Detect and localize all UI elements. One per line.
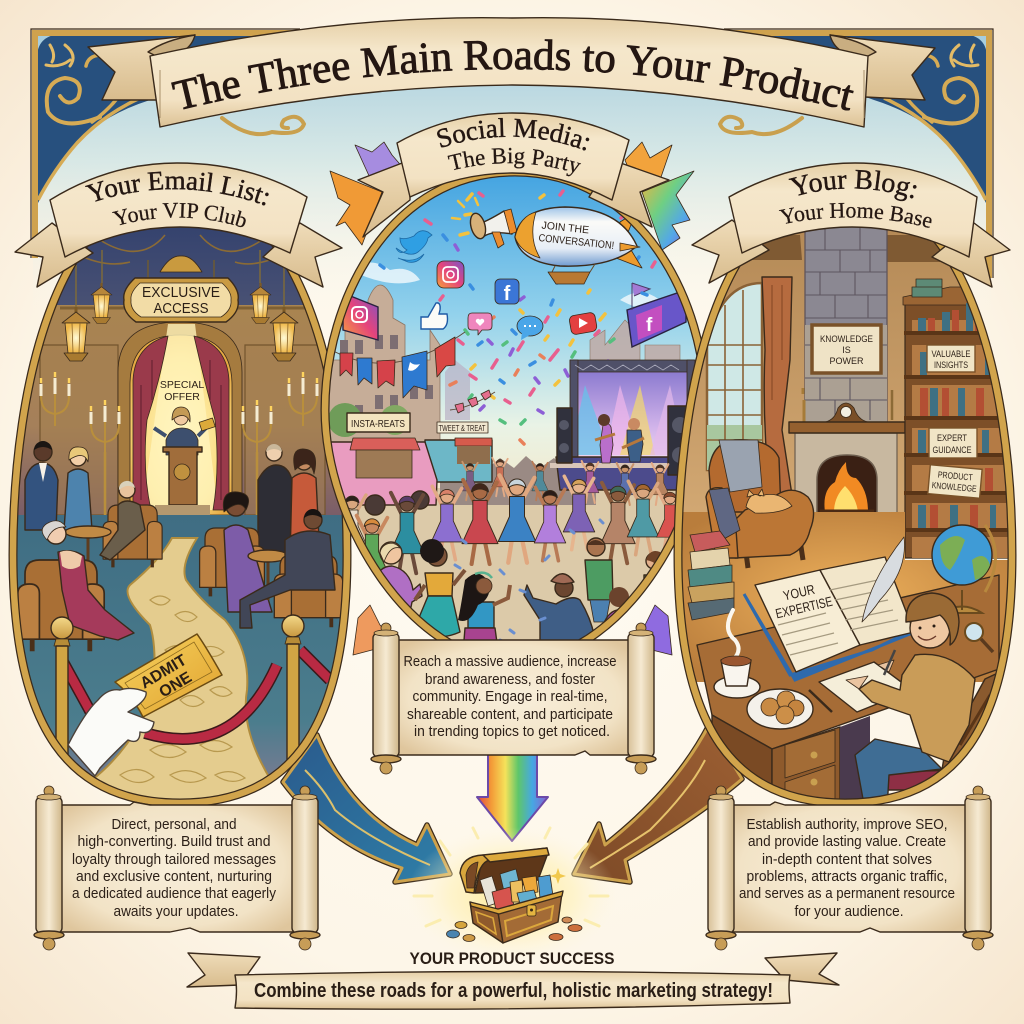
ribbon: social media bbox=[357, 112, 670, 238]
blimp: join the conversation bbox=[515, 207, 642, 284]
social description text: in trending topics to get noticed. bbox=[414, 723, 610, 740]
foreground dancer: green vest bbox=[585, 538, 613, 622]
round table left bbox=[66, 525, 112, 560]
mid-floor dancers bbox=[337, 458, 684, 592]
open book: your expertise: EXPERTISE bbox=[774, 594, 834, 621]
email description text: loyalty through tailored messages bbox=[72, 851, 276, 868]
scroll: email description bbox=[34, 786, 320, 950]
stone chimney bbox=[805, 225, 887, 425]
white glove hand bbox=[68, 688, 154, 776]
email description text: high-converting. Build trust and bbox=[78, 833, 270, 850]
chest body bbox=[470, 891, 563, 943]
ornamental frame with sky bbox=[31, 29, 993, 321]
globe bbox=[932, 525, 996, 613]
armchair with blanket bbox=[706, 440, 814, 568]
title ribbon bbox=[87, 17, 936, 128]
city buildings left bbox=[325, 285, 470, 445]
panel: social media party oval scene bbox=[320, 165, 710, 670]
plate of cookies bbox=[747, 689, 813, 729]
lantern small right bbox=[250, 283, 271, 324]
heading: social media: Social Media: bbox=[437, 118, 590, 150]
chest caption: YOUR PRODUCT SUCCESS bbox=[410, 949, 614, 968]
coffee cup with steam bbox=[714, 610, 760, 698]
open book: your expertise: YOUR bbox=[782, 582, 816, 604]
lantern large left bbox=[62, 307, 90, 361]
heading: your email list: Your Email List: bbox=[85, 172, 269, 206]
knowledge is power frame bbox=[812, 325, 881, 373]
special offer label bbox=[160, 381, 204, 400]
treasure chest with glow bbox=[407, 827, 617, 963]
mantel clock and candle bbox=[803, 388, 892, 422]
velvet rope bbox=[62, 650, 330, 739]
bookshelf with labels: KNOWLEDGE bbox=[931, 480, 977, 494]
arrow: rainbow road into chest bbox=[477, 750, 548, 841]
food truck: tweet and treat bbox=[425, 422, 492, 482]
billboard: instagram left bbox=[343, 293, 378, 340]
megaphone icon bbox=[452, 198, 517, 248]
email description text: and exclusive content, nurturing bbox=[76, 868, 272, 885]
special offer label: OFFER bbox=[164, 391, 200, 403]
curtain bbox=[762, 277, 792, 495]
panel: blog home base oval scene bbox=[670, 180, 1020, 810]
spiky party bursts behind centre oval bbox=[330, 142, 694, 655]
lantern large right bbox=[270, 307, 298, 361]
blimp: join the conversation: JOIN THE bbox=[541, 220, 590, 236]
chest contents bbox=[480, 869, 553, 910]
candelabra left wall bbox=[41, 372, 69, 426]
foreground dancer: man with hat bbox=[524, 574, 595, 665]
winding golden carpet road bbox=[94, 537, 269, 798]
chest lid bbox=[460, 848, 549, 893]
food truck: insta-reats: INSTA-REATS bbox=[351, 418, 405, 430]
arrow: brown road into chest bbox=[574, 725, 742, 882]
magnifying glass bbox=[965, 623, 993, 652]
foreground child: purple hoodie bbox=[600, 587, 633, 640]
bookshelf with labels: EXPERT bbox=[937, 433, 967, 444]
facebook icon bbox=[495, 279, 519, 305]
notebook bbox=[819, 662, 912, 712]
blog description text: for your audience. bbox=[794, 903, 904, 920]
ribbon: your email list bbox=[14, 162, 343, 288]
pencil on desk bbox=[809, 690, 832, 712]
social description text: community. Engage in real-time, bbox=[412, 688, 608, 705]
food truck: insta-reats bbox=[328, 413, 437, 515]
guest: woman in red bbox=[291, 448, 320, 536]
knowledge is power frame: POWER bbox=[829, 356, 864, 366]
panel: email VIP club oval scene bbox=[8, 228, 352, 804]
knowledge is power frame: IS bbox=[842, 345, 851, 355]
heart chat icon bbox=[468, 313, 492, 335]
blog description text: Establish authority, improve SEO, bbox=[746, 816, 948, 833]
guest: seated man and chair bbox=[100, 481, 162, 567]
blog description text: problems, attracts organic traffic, bbox=[746, 868, 948, 885]
blog description text: and serves as a permanent resource bbox=[739, 885, 955, 902]
hanging sign: exclusive access: EXCLUSIVE bbox=[142, 285, 220, 301]
gold flourish under title left bbox=[222, 117, 304, 134]
hanging sign: exclusive access: ACCESS bbox=[154, 301, 208, 317]
chat bubble icon bbox=[517, 316, 543, 340]
bookshelf with labels: VALUABLE bbox=[932, 349, 970, 359]
top-left blue corner ornament bbox=[37, 34, 320, 205]
ground and distant crowd bbox=[320, 488, 710, 670]
round table right bbox=[248, 550, 288, 600]
admit one ticket: ONE bbox=[156, 669, 195, 701]
subheading: your vip club: Your VIP Club bbox=[112, 202, 246, 228]
arrow: blue road into chest bbox=[283, 735, 450, 882]
social description text: shareable content, and participate bbox=[407, 706, 613, 723]
special offer label: SPECIAL bbox=[160, 379, 204, 391]
guest: man in blue suit bbox=[25, 441, 58, 530]
title text: The Three Main Roads to Your Product bbox=[171, 39, 854, 110]
social description text: brand awareness, and foster bbox=[425, 671, 595, 688]
floor confetti bbox=[410, 520, 603, 642]
email description text: a dedicated audience that eagerly bbox=[72, 885, 276, 902]
twitter bird icon bbox=[396, 231, 432, 262]
guest: woman in purple on armchair bbox=[200, 492, 272, 612]
confetti bbox=[380, 191, 655, 444]
billboard: facebook right bbox=[627, 283, 686, 347]
blog description text: and provide lasting value. Create bbox=[748, 833, 946, 850]
candelabra standing right bbox=[243, 400, 271, 515]
blog description text: in-depth content that solves bbox=[762, 851, 932, 868]
hanging sign: exclusive access bbox=[124, 256, 238, 322]
email description text: awaits your updates. bbox=[114, 903, 238, 920]
guest: man in grey suit on armchair bbox=[240, 509, 343, 628]
bookshelf with labels: GUIDANCE bbox=[932, 445, 972, 456]
guest: blonde woman bbox=[64, 447, 92, 530]
candelabra standing left bbox=[91, 400, 119, 515]
video play icon bbox=[569, 312, 598, 335]
guest: tuxedo man bbox=[258, 444, 292, 555]
billboard: facebook right: f bbox=[646, 315, 653, 336]
wood floor bbox=[670, 512, 1020, 682]
fireplace bbox=[789, 422, 905, 515]
bottom ribbon message: Combine these roads for a powerful, holistic marketing strategy! bbox=[254, 980, 773, 1002]
bottom ribbon bbox=[187, 953, 839, 1009]
scroll: blog description bbox=[706, 786, 993, 950]
instagram icon bbox=[437, 261, 464, 288]
gold flourish under title right bbox=[720, 117, 802, 134]
scroll: social media description bbox=[371, 623, 656, 774]
subheading: your home base: Your Home Base bbox=[778, 202, 932, 228]
heading: your blog: Your Blog: bbox=[788, 170, 917, 202]
foreground dancer: teal skirt bbox=[413, 539, 465, 637]
admit one ticket: ADMIT bbox=[138, 652, 190, 692]
bookshelf with labels: INSIGHTS bbox=[934, 360, 968, 370]
candelabra right wall bbox=[289, 372, 317, 426]
ribbon: your blog bbox=[691, 162, 1011, 288]
window bbox=[707, 283, 762, 470]
speaker at podium bbox=[154, 407, 215, 455]
bunting flags bbox=[328, 332, 495, 413]
city buildings right bbox=[590, 320, 680, 360]
foreground dancer: lilac shirt bbox=[372, 542, 422, 655]
thumbs-up icon bbox=[421, 303, 448, 329]
blimp: join the conversation: CONVERSATION! bbox=[538, 232, 615, 252]
gold stanchion right bbox=[281, 614, 305, 760]
food truck: tweet and treat: TWEET & TREAT bbox=[438, 424, 486, 433]
book stack bbox=[688, 531, 734, 620]
floor bbox=[18, 515, 342, 776]
foreground dancer: teal shirt bbox=[644, 551, 665, 605]
writer at desk bbox=[846, 593, 1015, 810]
concert stage bbox=[550, 360, 695, 490]
email description text: Direct, personal, and bbox=[112, 816, 236, 833]
gold stanchion left bbox=[50, 616, 74, 754]
open book: your expertise bbox=[744, 557, 917, 680]
foreground dancer: long dark hair bbox=[458, 573, 510, 665]
guest: woman in crimson on armchair bbox=[18, 521, 134, 651]
bookshelf with labels bbox=[903, 279, 1015, 558]
sleeping cat bbox=[746, 489, 792, 513]
lantern small left bbox=[91, 283, 112, 324]
podium bbox=[163, 447, 202, 505]
knowledge is power frame: KNOWLEDGE bbox=[820, 334, 873, 344]
subheading: the big party: The Big Party bbox=[448, 148, 582, 176]
social description text: Reach a massive audience, increase bbox=[404, 653, 616, 670]
bookshelf with labels: PRODUCT bbox=[937, 470, 974, 483]
wooden desk bbox=[697, 575, 999, 810]
admit one ticket bbox=[115, 634, 222, 717]
feather quill bbox=[862, 537, 904, 622]
facebook icon: f bbox=[504, 283, 511, 305]
top-right blue corner ornament bbox=[690, 34, 987, 205]
